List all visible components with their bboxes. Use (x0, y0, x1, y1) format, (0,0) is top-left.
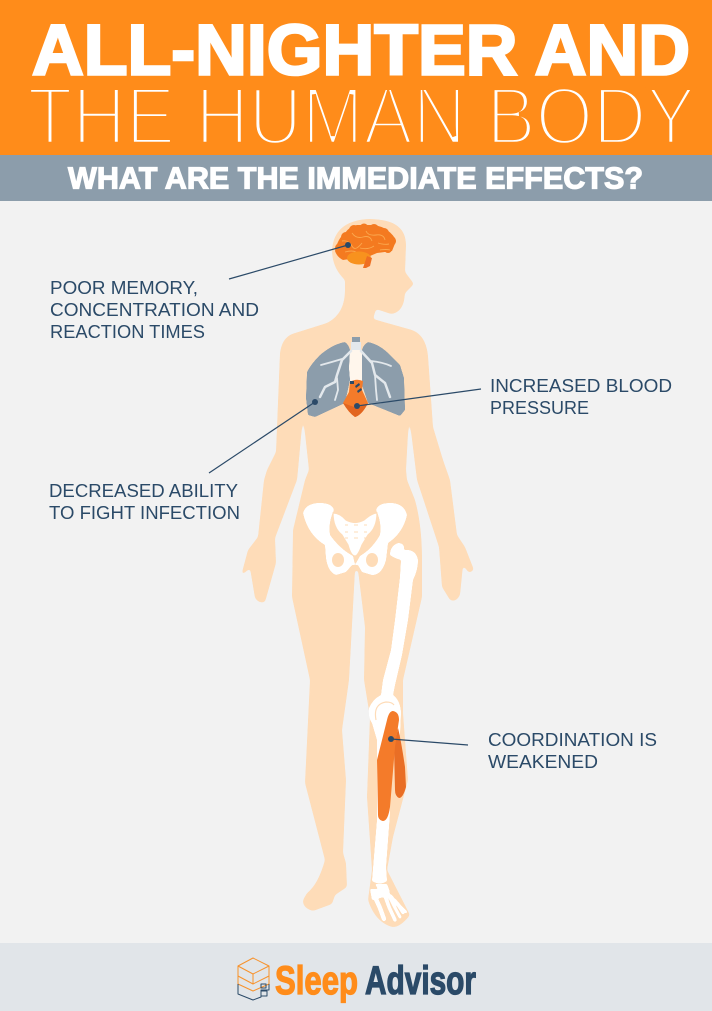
muscle: calf (377, 711, 406, 821)
callout: lungs: TO FIGHT INFECTION (49, 503, 240, 523)
header panel (0, 0, 712, 155)
title line 1: ALL-NIGHTER AND (32, 12, 690, 90)
callout: muscle (388, 730, 657, 772)
callout: brain: CONCENTRATION AND (50, 300, 259, 320)
bronchi (320, 342, 391, 400)
callout: lungs (49, 399, 318, 523)
logo wordmark: Sleep (275, 959, 358, 1003)
footer panel: Advisor (365, 959, 476, 1003)
body silhouette (241, 219, 474, 927)
human body figure (241, 219, 474, 927)
icon: mattress logo (238, 958, 269, 1000)
lungs (306, 337, 405, 417)
callout: muscle: WEAKENED (488, 752, 598, 772)
callout: brain: REACTION TIMES (50, 322, 205, 342)
subtitle bar (0, 155, 712, 201)
pelvis (303, 503, 407, 575)
footer panel (0, 943, 712, 1011)
lung gap (349, 350, 363, 382)
callout: brain (50, 242, 351, 342)
brain (335, 224, 396, 268)
callout: heart: INCREASED BLOOD (490, 376, 672, 396)
callout: lungs: DECREASED ABILITY (49, 481, 238, 501)
callout: heart (354, 376, 672, 418)
callout: heart: PRESSURE (490, 398, 589, 418)
callout: muscle: COORDINATION IS (488, 730, 657, 750)
callout: brain: POOR MEMORY, (50, 278, 198, 298)
subtitle bar: WHAT ARE THE IMMEDIATE EFFECTS? (68, 160, 643, 196)
heart (343, 380, 368, 417)
leg bones (369, 543, 418, 920)
